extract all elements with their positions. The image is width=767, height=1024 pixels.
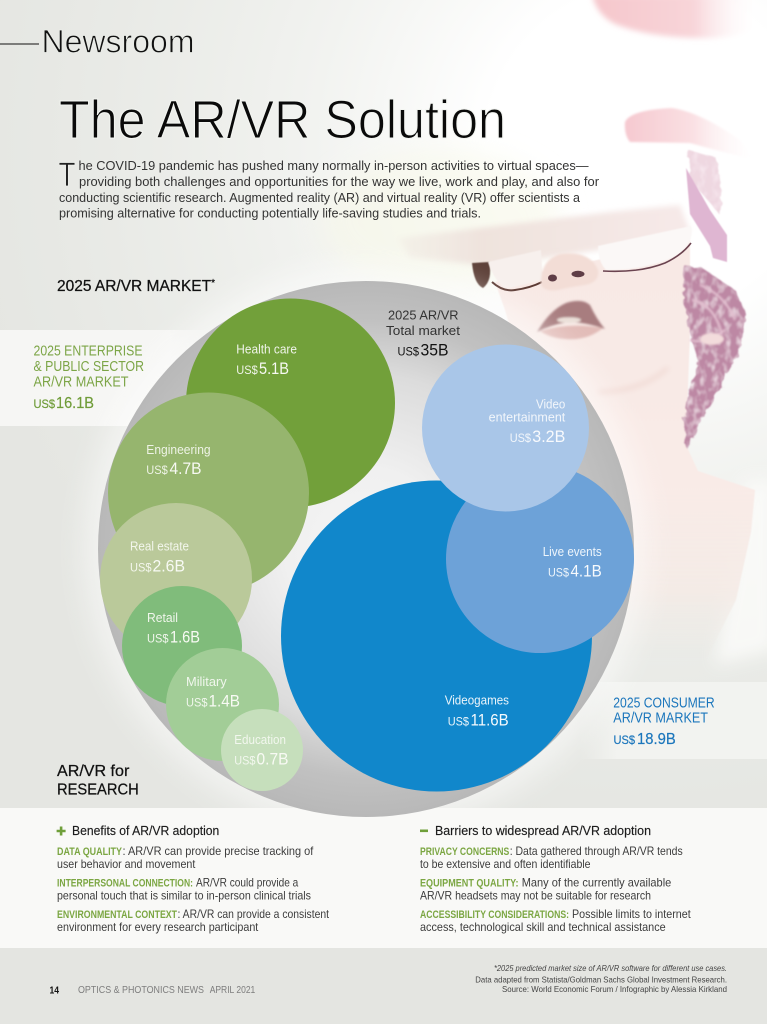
right eyecup edge [603, 243, 691, 271]
bubble: Engineering: US$ [146, 463, 168, 477]
heading: AR/VR for research: RESEARCH [57, 781, 139, 798]
callout: enterprise market [34, 344, 144, 412]
heading: AR/VR for research: AR/VR for [57, 763, 129, 780]
intro text block: providing both challenges and opportunities for the way we live, work and play, and also for [79, 174, 600, 189]
callout: enterprise market: AR/VR MARKET [34, 375, 129, 391]
intro text block [58, 156, 600, 220]
bubble: Real estate: Real estate [130, 540, 189, 554]
benefit: data quality [57, 845, 314, 871]
panel: benefits [57, 823, 330, 934]
glow behind chart [84, 267, 648, 831]
bubble chart: total market [98, 281, 634, 817]
chin shadow [598, 368, 668, 392]
band: consumer market [580, 682, 767, 759]
raised hand above headset [625, 108, 755, 160]
bubble: Videogames: US$ [448, 714, 469, 728]
source notes: Source: World Economic Forum / Infographic by Alessia Kirkland [502, 984, 727, 994]
bubble: Military [166, 648, 279, 761]
intro text block: T [58, 156, 76, 194]
barrier: equipment quality: Many of the currently available [522, 877, 671, 890]
callout: consumer market: 2025 CONSUMER [613, 695, 715, 711]
benefit: interpersonal connection: AR/VR could provide a [196, 877, 299, 890]
outer circle: total market [98, 281, 634, 817]
barrier: privacy concerns: to be extensive and often identifiable [420, 858, 590, 871]
barrier: equipment quality: EQUIPMENT QUALITY: [420, 878, 518, 890]
bubble: Video entertainment: 3.2B [532, 428, 565, 446]
bubble: Video entertainment: entertainment [489, 410, 566, 424]
bubble: Military: 1.4B [208, 693, 240, 711]
hair by the ear [683, 265, 746, 448]
barrier: accessibility considerations: Possible limits to internet [572, 908, 691, 921]
benefits heading: Benefits of AR/VR adoption [72, 823, 219, 838]
visor underside [398, 205, 690, 266]
footer: publication line: APRIL 2021 [210, 984, 255, 996]
outer circle: total market: 35B [420, 342, 448, 360]
bubble: Education: US$ [234, 753, 256, 767]
callout: enterprise market: US$ [34, 397, 55, 411]
bubble: Retail: Retail [147, 611, 178, 625]
benefit: environmental context: : AR/VR can provide a consistent [178, 908, 330, 921]
bubble: Video entertainment: Video [536, 397, 565, 411]
page number: 14 [50, 985, 59, 996]
callout: enterprise market: & PUBLIC SECTOR [34, 359, 144, 375]
outer circle: total market: US$ [398, 345, 419, 359]
photo: woman wearing VR headset [398, 0, 767, 672]
face and neck [495, 240, 755, 672]
bubble: Videogames: Videogames [445, 694, 509, 708]
panel: barriers [420, 823, 691, 934]
heading: 2025 market: 2025 AR/VR MARKET [57, 278, 211, 295]
bubble: Real estate: 2.6B [152, 557, 185, 575]
hand at top right [592, 0, 767, 38]
benefit: data quality: user behavior and movement [57, 858, 196, 871]
bubble: Video entertainment [422, 344, 589, 512]
light hair curls [690, 285, 735, 341]
benefit: interpersonal connection [57, 877, 311, 903]
callout: consumer market: US$ [614, 733, 635, 747]
benefit: environmental context: ENVIRONMENTAL CONTEXT [57, 909, 177, 921]
bubble: Health care: Health care [236, 342, 297, 356]
headset side strap [686, 168, 727, 262]
bubble: Engineering [108, 392, 309, 594]
barrier: equipment quality: AR/VR headsets may not be suitable for research [420, 890, 651, 903]
barrier: privacy concerns: : Data gathered through AR/VR tends [510, 845, 683, 858]
benefit: environmental context: environment for every research participant [57, 921, 259, 934]
callout: consumer market: 18.9B [637, 731, 676, 748]
benefit: interpersonal connection: personal touch that is similar to in-person clinical trials [57, 890, 311, 903]
bubble: Videogames [281, 480, 592, 792]
bubble: Live events [446, 465, 634, 653]
benefit: interpersonal connection: INTERPERSONAL CONNECTION: [57, 878, 193, 890]
title: The AR/VR Solution [59, 90, 506, 150]
heading: 2025 market: * [211, 278, 215, 289]
upper hair [688, 150, 722, 215]
garment and shoulder glow [715, 480, 767, 665]
icon: minus [420, 830, 428, 832]
bubble: Engineering: Engineering [146, 443, 211, 457]
bubble: Real estate: US$ [130, 560, 152, 574]
bubble: Retail [122, 586, 242, 706]
band: enterprise market [0, 330, 225, 426]
bubble: Retail: US$ [147, 632, 169, 646]
barrier: accessibility considerations [420, 908, 691, 934]
bubble: Health care [186, 298, 395, 508]
source notes: Data adapted from Statista/Goldman Sachs Global Investment Research. [475, 975, 727, 985]
nostrils [548, 271, 584, 282]
lips [537, 301, 605, 339]
icon: plus [57, 826, 66, 836]
bubble: Education: 0.7B [256, 750, 288, 768]
bubble: Videogames: 11.6B [470, 711, 509, 729]
outer circle: total market: Total market [386, 323, 460, 338]
bubble: Engineering: 4.7B [170, 460, 202, 478]
barrier: privacy concerns: PRIVACY CONCERNS [420, 846, 509, 858]
ear [700, 333, 724, 345]
benefit: data quality: : AR/VR can provide precise tracking of [122, 845, 314, 858]
callout: consumer market [613, 695, 715, 748]
nose [541, 253, 598, 290]
bubble: Live events: 4.1B [570, 563, 602, 581]
heading: AR/VR for research [57, 763, 139, 798]
bubble: Video entertainment: US$ [510, 431, 531, 445]
callout: enterprise market: 16.1B [56, 395, 94, 412]
footer: publication line: OPTICS & PHOTONICS NEWS [78, 984, 204, 996]
barrier: privacy concerns [420, 845, 683, 871]
left dark shadow [472, 262, 490, 288]
right eyecup [598, 226, 692, 270]
source notes: *2025 predicted market size of AR/VR software for different use cases. [494, 963, 727, 973]
callout: consumer market: AR/VR MARKET [613, 711, 708, 727]
bubble: Live events: US$ [548, 566, 569, 580]
intro text block: promising alternative for conducting potentially life-saving studies and trials. [59, 206, 481, 220]
benefit: data quality: DATA QUALITY [57, 846, 123, 858]
intro text block: conducting scientific research. Augmented reality (AR) and virtual reality (VR) offer scientists a [59, 190, 581, 205]
bubble: Real estate [100, 503, 252, 655]
bubble: Military: US$ [186, 696, 208, 710]
section label: Newsroom: Newsroom [42, 24, 194, 60]
bubble: Education: Education [234, 733, 286, 747]
bubble: Health care: US$ [236, 363, 258, 377]
barrier: equipment quality [420, 877, 671, 903]
barrier: accessibility considerations: access, technological skill and technical assistance [420, 921, 666, 934]
barriers heading: Barriers to widespread AR/VR adoption [435, 823, 651, 838]
bubble: Retail: 1.6B [170, 629, 200, 647]
panel: research white strip [0, 808, 767, 948]
benefit: environmental context [57, 908, 330, 934]
left eyecup [488, 250, 543, 289]
intro text block: he COVID-19 pandemic has pushed many normally in-person activities to virtual spaces— [78, 158, 589, 173]
bubble: Military: Military [186, 675, 227, 689]
source notes [475, 963, 727, 994]
bubble: Health care: 5.1B [259, 360, 289, 378]
bubble: Live events: Live events [543, 545, 602, 559]
left eyecup edge [492, 282, 542, 290]
callout: enterprise market: 2025 ENTERPRISE [34, 344, 143, 360]
barrier: accessibility considerations: ACCESSIBILITY CONSIDERATIONS: [420, 909, 569, 921]
outer circle: total market: 2025 AR/VR [388, 307, 458, 322]
bubble: Education [221, 709, 303, 791]
